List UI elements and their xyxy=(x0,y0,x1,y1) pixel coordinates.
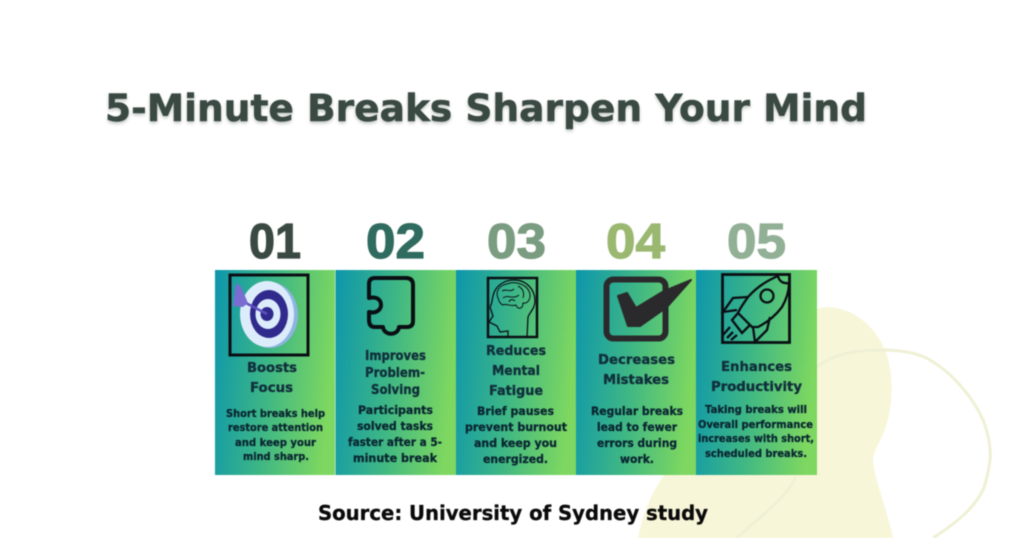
decorative ring outline xyxy=(737,350,990,538)
heading: Enhances xyxy=(721,359,792,375)
body text: Brief pauses xyxy=(477,404,554,418)
source line: Source: University of Sydney study xyxy=(318,501,708,525)
heading: Boosts xyxy=(247,360,297,376)
body text: faster after a 5- xyxy=(348,435,442,449)
body text: mind sharp. xyxy=(243,451,309,463)
panel: decreases mistakes xyxy=(576,270,696,475)
body text: increases with short, xyxy=(698,433,814,445)
heading: Fatigue xyxy=(489,383,543,399)
icon: check mark in box xyxy=(606,280,691,338)
heading xyxy=(598,352,675,388)
step numbers: 05 xyxy=(727,215,786,269)
heading xyxy=(486,343,546,399)
heading: Reduces xyxy=(486,343,546,359)
body text: work. xyxy=(620,452,654,466)
body text: Overall performance xyxy=(698,419,813,431)
icon: head with brain xyxy=(488,278,537,337)
heading xyxy=(247,360,297,396)
body text: Taking breaks will xyxy=(705,404,807,416)
body text: Regular breaks xyxy=(591,404,683,418)
step numbers: 04 xyxy=(606,215,665,269)
title: 5-Minute Breaks Sharpen Your Mind xyxy=(105,89,867,132)
body text: and keep your xyxy=(235,437,317,449)
heading: Productivity xyxy=(711,379,802,395)
body text: Short breaks help xyxy=(226,408,325,420)
body text xyxy=(591,404,683,466)
body text xyxy=(465,404,567,466)
panel: enhances productivity xyxy=(696,270,817,475)
body text: restore attention xyxy=(228,422,323,434)
heading: Mental xyxy=(492,363,540,379)
body text xyxy=(348,403,442,465)
heading: Solving xyxy=(371,382,420,398)
body text: energized. xyxy=(483,452,548,466)
heading xyxy=(365,348,426,398)
icon: rocket xyxy=(722,274,790,342)
body text: and keep you xyxy=(474,436,557,450)
step numbers: 01 xyxy=(249,215,301,269)
panel: reduces mental fatigue xyxy=(456,270,576,475)
heading xyxy=(711,359,802,395)
body text: Participants xyxy=(358,403,433,417)
heading: Mistakes xyxy=(603,372,669,388)
body text xyxy=(698,404,814,460)
body text: minute break xyxy=(353,451,437,465)
step numbers: 03 xyxy=(487,215,546,269)
icon: target with arrow xyxy=(230,275,308,355)
heading: Decreases xyxy=(598,352,675,368)
step numbers xyxy=(249,215,786,269)
body text: solved tasks xyxy=(357,419,433,433)
step numbers: 02 xyxy=(366,215,425,269)
icon: puzzle piece xyxy=(369,278,413,334)
panel: improves problem-solving xyxy=(336,270,456,475)
body text: prevent burnout xyxy=(465,420,567,434)
heading: Problem- xyxy=(365,365,425,381)
body text: errors during xyxy=(597,436,677,450)
heading: Focus xyxy=(250,380,293,396)
panel: boosts focus xyxy=(215,270,335,475)
body text: lead to fewer xyxy=(597,420,677,434)
decorative background blob xyxy=(638,307,893,538)
body text: scheduled breaks. xyxy=(705,448,807,460)
body text xyxy=(226,408,325,463)
heading: Improves xyxy=(365,348,426,364)
title: 5-Minute Breaks Sharpen Your Mind xyxy=(105,87,867,130)
